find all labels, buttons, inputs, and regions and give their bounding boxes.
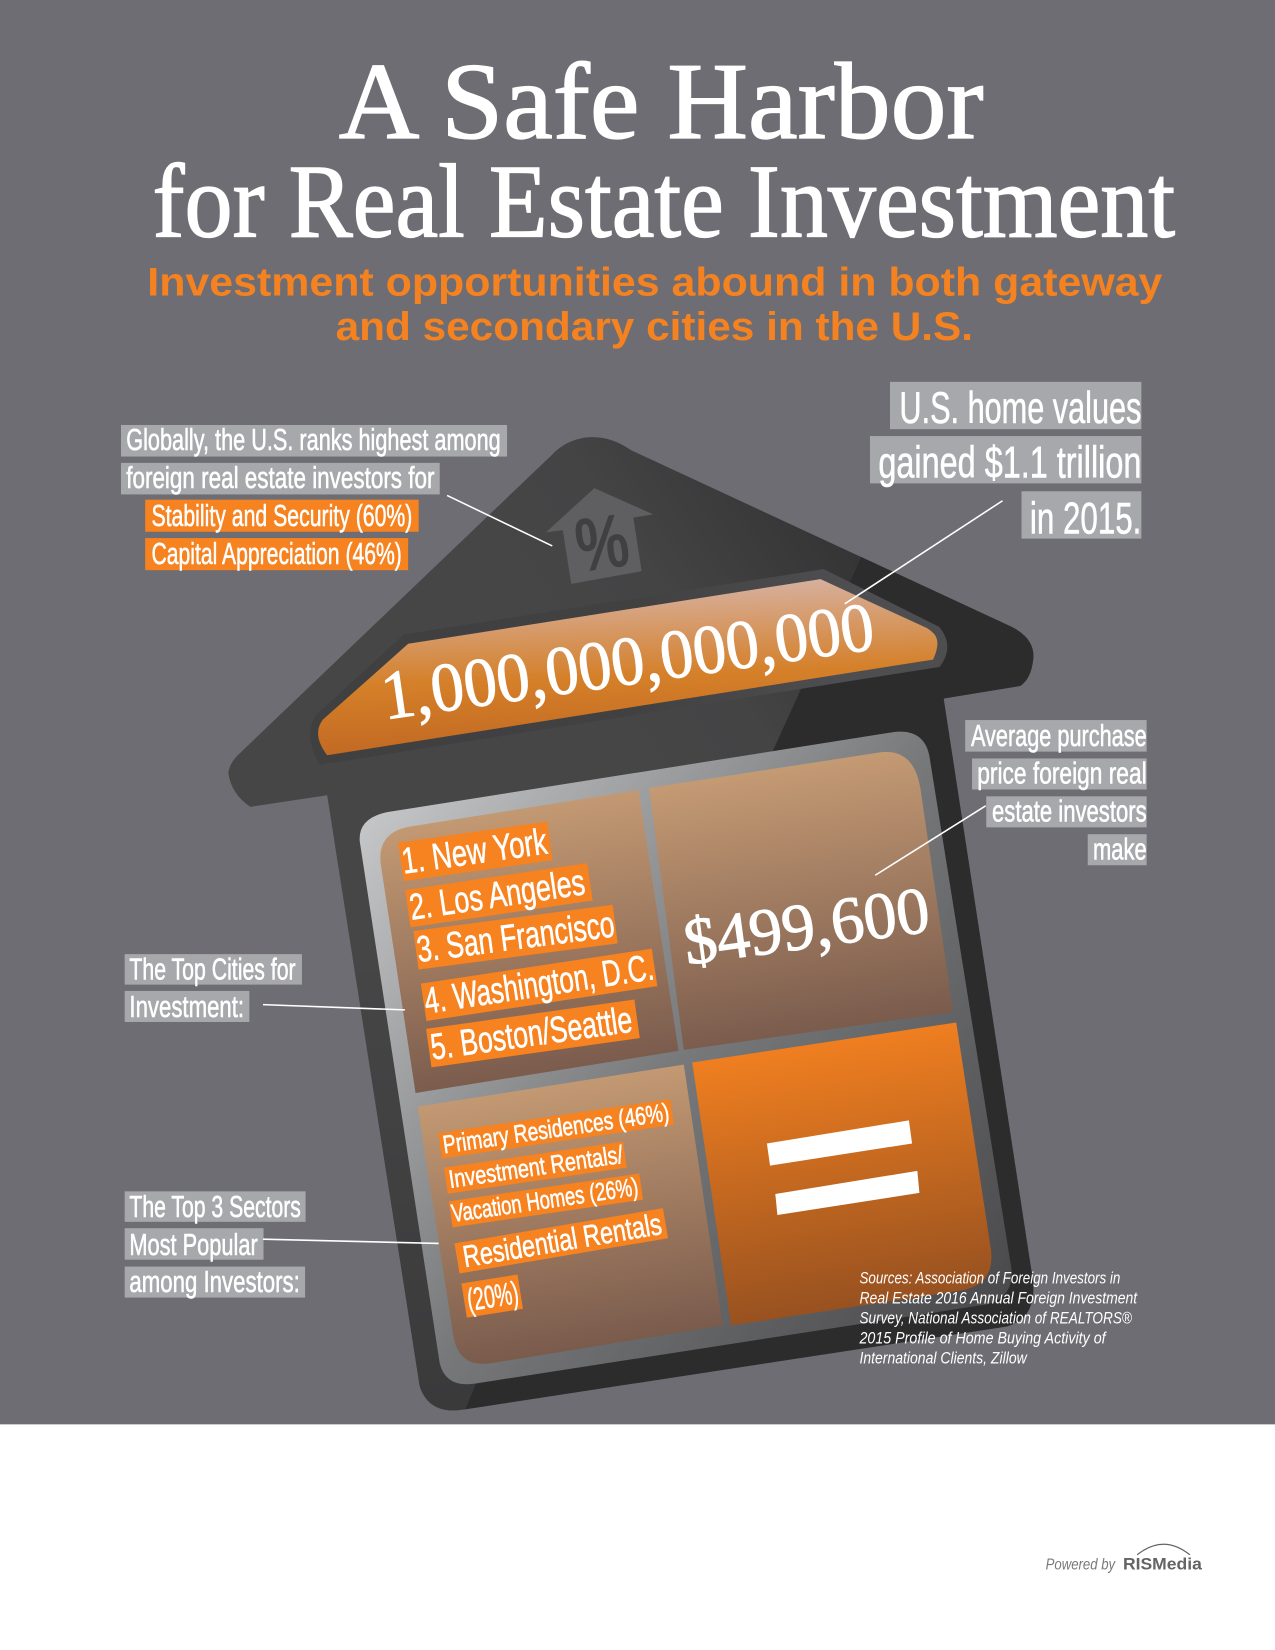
sector 5	[461, 1274, 523, 1318]
price value: $499,600	[679, 874, 934, 980]
callout: home values: gained $1.1 trillion	[878, 439, 1141, 488]
city 1	[398, 820, 553, 882]
sources text: Survey, National Association of REALTORS®	[859, 1309, 1132, 1327]
sources text: International Clients, Zillow	[859, 1349, 1028, 1367]
sources text: Real Estate 2016 Annual Foreign Investment	[859, 1289, 1138, 1307]
sector 4: Residential Rentals	[460, 1207, 664, 1274]
icon: percent house arrow	[546, 488, 653, 589]
sector 4	[454, 1206, 668, 1275]
brand logo	[1046, 1544, 1203, 1574]
title	[153, 41, 1175, 260]
panel: orange equals	[692, 1023, 991, 1325]
house silhouette	[228, 437, 1033, 1410]
city 3	[413, 903, 618, 970]
panel: average price	[649, 752, 953, 1050]
panel: top sectors	[418, 1065, 723, 1364]
sector 1	[438, 1098, 674, 1160]
callout: average purchase price: Average purchase	[971, 719, 1147, 753]
icon: logo arc	[1137, 1544, 1190, 1555]
city 2	[405, 861, 593, 928]
panel: top cities	[380, 790, 679, 1093]
sector 1: Primary Residences (46%)	[441, 1099, 671, 1159]
callout: global ranking: Globally, the U.S. ranks highest among	[126, 423, 501, 457]
subtitle: and secondary cities in the U.S.	[336, 305, 973, 349]
callout: average purchase price: make	[1093, 832, 1147, 866]
city 5: 5. Boston/Seattle	[428, 999, 635, 1068]
sector 5: (20%)	[464, 1274, 521, 1318]
window frame	[360, 732, 1012, 1384]
arrow: ranking leader line	[447, 495, 552, 546]
callout: top cities: Investment:	[129, 990, 244, 1024]
arrow: sectors leader line	[263, 1239, 439, 1243]
callout: global ranking: foreign real estate investors for	[126, 461, 434, 495]
callout: global ranking	[121, 423, 507, 571]
icon: equals bars	[767, 1120, 919, 1215]
sources text: Sources: Association of Foreign Investors in	[859, 1269, 1120, 1287]
icon: percent house arrow: %	[570, 498, 634, 589]
callout: top sectors: The Top 3 Sectors	[129, 1190, 301, 1224]
house lower left shade	[386, 1172, 492, 1410]
city 4: 4. Washington, D.C.	[421, 946, 656, 1021]
city 4	[420, 946, 657, 1022]
sources text	[859, 1269, 1138, 1367]
callout: top sectors: Most Popular	[129, 1228, 258, 1262]
callout: top sectors: among Investors:	[129, 1265, 300, 1299]
subtitle: Investment opportunities abound in both gateway	[147, 261, 1163, 305]
city 3: 3. San Francisco	[414, 903, 617, 970]
house shadow side	[463, 556, 1062, 1415]
banner	[318, 579, 937, 755]
callout: average purchase price	[965, 719, 1147, 866]
callout: average purchase price: estate investors	[992, 795, 1147, 829]
sources text: 2015 Profile of Home Buying Activity of	[859, 1329, 1107, 1347]
banner number: 1,000,000,000,000	[376, 588, 879, 735]
callout: top sectors	[125, 1190, 306, 1299]
city 2: 2. Los Angeles	[407, 861, 588, 928]
city 1: 1. New York	[399, 821, 550, 882]
arrow: home values leader line	[845, 501, 1003, 604]
title: A Safe Harbor	[339, 41, 984, 162]
sector 3: Vacation Homes (26%)	[450, 1173, 640, 1228]
sector 3	[449, 1173, 643, 1228]
sector 2: Investment Rentals/	[447, 1141, 626, 1194]
title: for Real Estate Investment	[153, 143, 1175, 260]
callout: home values: in 2015.	[1030, 494, 1141, 543]
subtitle	[147, 261, 1163, 349]
callout: global ranking: Stability and Security (60%)	[151, 499, 412, 533]
callout: home values	[870, 382, 1141, 543]
arrow: price leader line	[875, 806, 986, 875]
callout: average purchase price: price foreign real	[977, 757, 1147, 791]
brand logo: RISMedia	[1123, 1555, 1203, 1574]
house illustration	[228, 437, 1062, 1420]
callout: top cities	[125, 952, 302, 1024]
city 5	[426, 998, 640, 1068]
callout: home values: U.S. home values	[899, 384, 1141, 433]
arrow: cities leader line	[263, 1005, 405, 1010]
callout: top cities: The Top Cities for	[129, 952, 296, 986]
callout: global ranking: Capital Appreciation (46%)	[151, 537, 402, 571]
brand logo: Powered by	[1046, 1557, 1116, 1574]
banner frame	[310, 569, 947, 765]
